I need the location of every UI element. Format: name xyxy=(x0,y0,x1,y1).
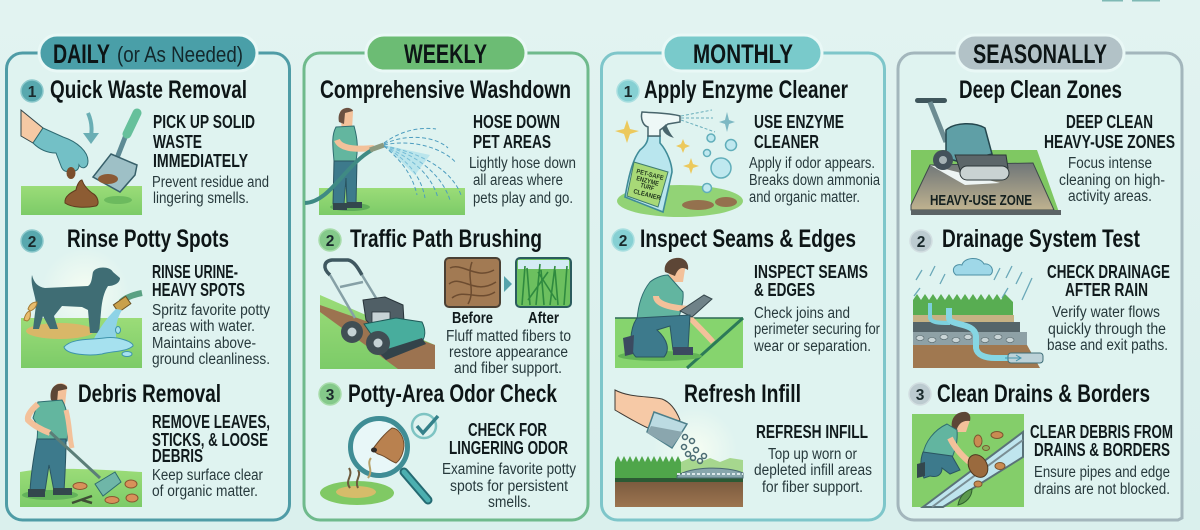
icon: man hosing down turf xyxy=(305,108,465,215)
text block: rinse urine-heavy spots: HEAVY SPOTS xyxy=(152,280,245,300)
text block: fluff matted fibers xyxy=(446,328,571,377)
task heading: drainage system test xyxy=(910,225,1141,253)
text block: remove leaves: STICKS, & LOOSE xyxy=(152,430,268,450)
text block: inspect seams & edges: Check joins and xyxy=(754,305,850,322)
text block: inspect seams & edges xyxy=(753,262,880,355)
text block: pick up solid waste: IMMEDIATELY xyxy=(153,151,248,171)
panel: monthly xyxy=(602,35,884,520)
text block: deep clean heavy-use zones: DEEP CLEAN xyxy=(1066,112,1153,132)
text block: remove leaves: Keep surface clear xyxy=(152,467,263,484)
before / after comparison: After xyxy=(528,310,559,327)
icon: enzyme spray bottle xyxy=(615,110,743,217)
text block: use enzyme cleaner xyxy=(749,112,880,206)
panel: seasonally xyxy=(898,35,1182,520)
task heading: apply enzyme cleaner xyxy=(617,76,848,104)
text block: check for lingering odor: CHECK FOR xyxy=(468,420,547,440)
text block: use enzyme cleaner: CLEANER xyxy=(754,132,819,152)
task heading: clean drains & borders: 3 xyxy=(916,387,925,404)
panel: daily xyxy=(6,35,290,520)
icon: dog and hose rinsing xyxy=(21,248,142,368)
panel: weekly xyxy=(304,35,588,520)
text block: rinse urine-heavy spots xyxy=(152,262,270,368)
text block: remove leaves: DEBRIS xyxy=(152,446,203,466)
task heading: traffic path brushing xyxy=(319,225,542,253)
header pill: monthly xyxy=(663,35,822,71)
text block: check drainage after rain: AFTER RAIN xyxy=(1065,280,1148,300)
task heading: inspect seams xyxy=(612,225,856,253)
text block: check for lingering odor xyxy=(442,420,576,511)
text block: deep clean heavy-use zones xyxy=(1044,112,1175,205)
task heading: apply enzyme cleaner: 1 xyxy=(624,84,633,101)
icon: magnifier odor check xyxy=(320,414,438,505)
text block: check drainage after rain xyxy=(1047,262,1170,354)
task heading: potty-area odor check: Potty-Area Odor Check xyxy=(348,380,557,408)
header pill: weekly: WEEKLY xyxy=(404,39,487,69)
before / after comparison: Before xyxy=(452,310,493,327)
icon: hand pouring infill xyxy=(615,390,743,507)
header pill: seasonally xyxy=(957,35,1124,71)
text block: check drainage after rain: quickly through the xyxy=(1048,321,1166,338)
task heading: quick waste removal: Quick Waste Removal xyxy=(50,76,247,104)
text block: refresh infill xyxy=(754,422,872,496)
text block: pick up solid waste: Prevent residue and xyxy=(152,174,269,191)
arrow xyxy=(504,276,512,292)
text block: check drainage after rain: base and exit paths. xyxy=(1047,337,1168,354)
task heading: traffic path brushing: Traffic Path Brushing xyxy=(350,225,542,253)
header pill: daily: DAILY xyxy=(53,39,110,69)
icon: enzyme spray bottle: ENZYME xyxy=(635,175,660,188)
header pill: daily: (or As Needed) xyxy=(117,42,243,67)
text block: use enzyme cleaner: USE ENZYME xyxy=(754,112,844,132)
text block: deep clean heavy-use zones: activity areas. xyxy=(1068,188,1152,205)
header pill: weekly xyxy=(366,35,526,71)
text block: inspect seams & edges: perimeter securing for xyxy=(754,321,880,338)
text block: hose down pet areas: PET AREAS xyxy=(473,132,551,152)
text block: clear debris from drains xyxy=(1030,422,1173,498)
task heading: drainage system test: 2 xyxy=(917,234,925,251)
task heading: potty-area odor check: 3 xyxy=(326,387,335,404)
text block: rinse urine-heavy spots: ground cleanliness. xyxy=(152,351,270,368)
text block: fluff matted fibers: Fluff matted fibers to xyxy=(446,328,571,345)
icon: power brush on turf path xyxy=(320,260,435,369)
text block: refresh infill: REFRESH INFILL xyxy=(756,422,868,442)
text block: hose down pet areas: Lightly hose down xyxy=(469,155,576,172)
header pill: monthly: MONTHLY xyxy=(693,39,793,69)
text block: remove leaves: of organic matter. xyxy=(152,483,258,500)
text block: rinse urine-heavy spots: Spritz favorite potty xyxy=(152,302,270,319)
text block: check for lingering odor: Examine favorite potty xyxy=(442,461,576,478)
task heading: inspect seams: 2 xyxy=(619,233,627,250)
icon: enzyme spray bottle: CLEANER xyxy=(632,188,662,202)
task heading: comprehensive washdown: Comprehensive Washdown xyxy=(320,76,571,104)
task heading: rinse potty spots: 2 xyxy=(28,234,36,251)
task heading: refresh infill: Refresh Infill xyxy=(684,380,801,408)
task heading: drainage system test: Drainage System Test xyxy=(942,225,1141,253)
task heading: quick waste removal xyxy=(21,76,247,104)
header pill: seasonally: SEASONALLY xyxy=(973,39,1107,69)
task heading: apply enzyme cleaner: Apply Enzyme Cleaner xyxy=(644,76,848,104)
text block: hose down pet areas: HOSE DOWN xyxy=(473,112,560,132)
text block: refresh infill: for fiber support. xyxy=(762,479,863,496)
text block: fluff matted fibers: restore appearance xyxy=(449,344,568,361)
text block: hose down pet areas: pets play and go. xyxy=(473,190,573,207)
task heading: deep clean zones: Deep Clean Zones xyxy=(959,76,1122,104)
text block: inspect seams & edges: & EDGES xyxy=(754,280,815,300)
icon: deep clean machine on heavy-use zone xyxy=(911,98,1061,215)
icon: man raking debris xyxy=(20,383,142,507)
text block: refresh infill: Top up worn or xyxy=(768,446,857,463)
text block: use enzyme cleaner: and organic matter. xyxy=(749,189,860,206)
task heading: rinse potty spots xyxy=(21,225,229,253)
icon: man inspecting seam xyxy=(615,258,743,368)
text block: check for lingering odor: spots for persistent xyxy=(450,478,569,495)
text block: rinse urine-heavy spots: RINSE URINE- xyxy=(152,262,238,282)
icon: gloved hand picking up waste xyxy=(21,110,142,215)
icon: enzyme spray bottle: TURF xyxy=(639,182,655,193)
text block: hose down pet areas xyxy=(469,112,576,207)
icon: man clearing drain xyxy=(912,412,1024,507)
task heading: potty-area odor check xyxy=(319,380,557,408)
task heading: rinse potty spots: Rinse Potty Spots xyxy=(67,225,229,253)
text block: fluff matted fibers: and fiber support. xyxy=(454,360,562,377)
task heading: quick waste removal: 1 xyxy=(28,84,37,101)
icon: enzyme spray bottle: PET-SAFE xyxy=(635,168,665,182)
before swatch xyxy=(445,258,500,307)
task heading: debris removal: Debris Removal xyxy=(78,380,221,408)
text block: inspect seams & edges: wear or separation. xyxy=(753,338,871,355)
before / after comparison xyxy=(445,258,571,327)
text block: rinse urine-heavy spots: Maintains above- xyxy=(152,335,256,352)
icon: deep clean machine on heavy-use zone: HEAVY-USE ZONE xyxy=(930,192,1032,209)
text block: check for lingering odor: LINGERING ODOR xyxy=(449,438,568,458)
after swatch xyxy=(516,258,571,307)
text block: pick up solid waste: lingering smells. xyxy=(153,190,249,207)
text block: inspect seams & edges: INSPECT SEAMS xyxy=(754,262,868,282)
text block: remove leaves: REMOVE LEAVES, xyxy=(152,412,270,432)
header pill: daily xyxy=(39,35,257,71)
text block: deep clean heavy-use zones: Focus intense xyxy=(1068,155,1152,172)
text block: pick up solid waste xyxy=(152,112,269,207)
task heading: traffic path brushing: 2 xyxy=(326,233,334,250)
text block: rinse urine-heavy spots: areas with water. xyxy=(152,318,255,335)
task heading: inspect seams: Inspect Seams & Edges xyxy=(640,225,856,253)
text block: pick up solid waste: PICK UP SOLID xyxy=(153,112,255,132)
text block: use enzyme cleaner: Breaks down ammonia xyxy=(749,172,880,189)
text block: clear debris from drains: drains are not blocked. xyxy=(1034,481,1170,498)
text block: use enzyme cleaner: Apply if odor appears. xyxy=(749,155,875,172)
icon: drainage cross section with rain xyxy=(913,258,1043,368)
text block: clear debris from drains: Ensure pipes and edge xyxy=(1034,464,1170,481)
text block: pick up solid waste: WASTE xyxy=(153,132,202,152)
text block: refresh infill: depleted infill areas xyxy=(754,462,872,479)
text block: hose down pet areas: all areas where xyxy=(473,172,563,189)
text block: check drainage after rain: Verify water flows xyxy=(1052,304,1160,321)
text block: remove leaves xyxy=(152,412,270,500)
text block: check for lingering odor: smells. xyxy=(488,494,531,511)
text block: deep clean heavy-use zones: cleaning on high- xyxy=(1059,172,1165,189)
